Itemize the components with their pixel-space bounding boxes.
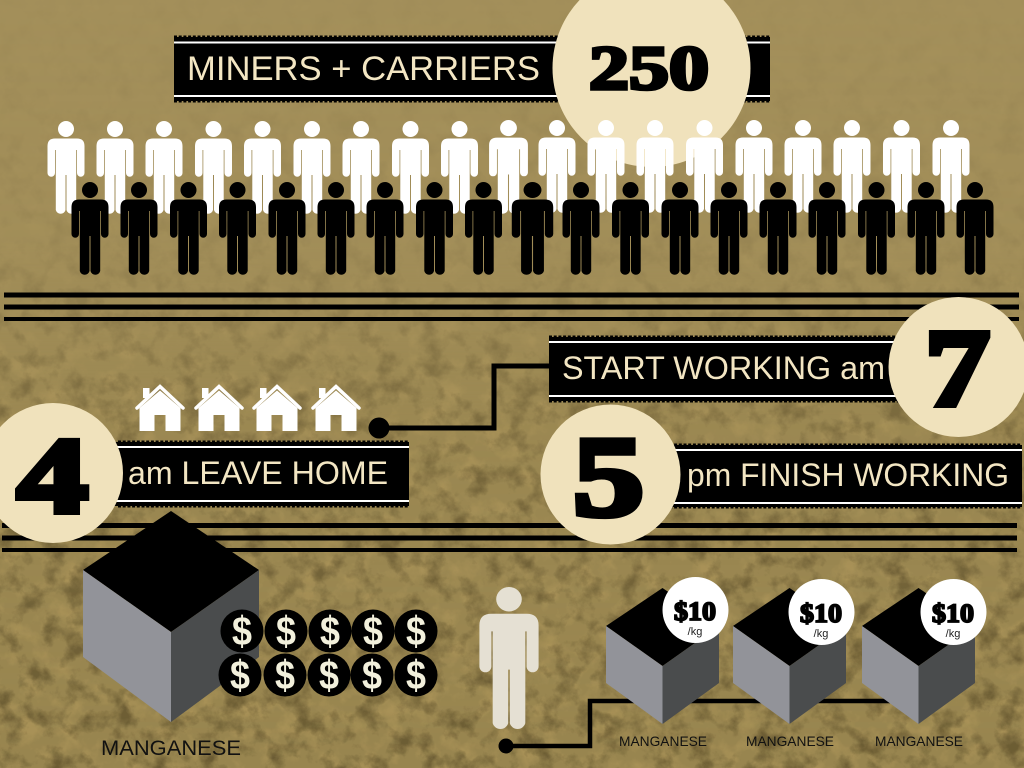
label: manganese 2: MANGANESE [746, 733, 834, 749]
price badge 3 [920, 579, 986, 645]
banner: miners + carriers [174, 37, 770, 101]
cube group 3 [862, 579, 986, 724]
price badge 1 [662, 577, 728, 643]
connector: carrier to cubes [498, 701, 890, 754]
badge: 250: 250 [589, 35, 709, 103]
dollar coins: $ [362, 652, 382, 698]
badge: 7: 7 [925, 307, 990, 429]
label: manganese 3: MANGANESE [875, 733, 963, 749]
banner: start working [549, 337, 909, 401]
background texture [0, 258, 1024, 768]
dollar coins [218, 608, 438, 698]
badge: 5 [540, 404, 680, 544]
banner text: leave home: am LEAVE HOME [128, 455, 388, 491]
dollar coins: $ [406, 652, 426, 698]
price badge 2: /kg [814, 628, 828, 640]
dollar coins: $ [406, 608, 426, 654]
cube group 2 [733, 579, 854, 724]
price badge 2: $10 [800, 599, 842, 628]
price badge 1: $10 [674, 597, 716, 626]
carrier figure [479, 587, 539, 729]
banner text: finish working: pm FINISH WORKING [687, 457, 1009, 493]
label: manganese: MANGANESE [101, 737, 241, 760]
price badge 3: /kg [946, 628, 960, 640]
connector: home to work [368, 366, 552, 438]
price badge 2 [788, 579, 854, 645]
badge: 5: 5 [573, 413, 644, 540]
badge: 7 [888, 297, 1024, 437]
label: manganese 1: MANGANESE [619, 733, 707, 749]
black miners row [72, 182, 994, 275]
banner text: miners + carriers: MINERS + CARRIERS [187, 50, 540, 88]
banner: finish working [660, 445, 1022, 507]
dollar coins: $ [230, 652, 250, 698]
icons: four houses [137, 386, 359, 431]
badge: 4: 4 [17, 417, 88, 536]
cube group 1 [606, 577, 728, 724]
dollar coins: $ [320, 608, 340, 654]
badge: 250 [552, 0, 750, 167]
price badge 1: /kg [688, 626, 702, 638]
banner text: start working: START WORKING am [562, 350, 885, 386]
badge: 4 [0, 403, 123, 543]
dollar coins: $ [232, 608, 252, 654]
white miners row [48, 120, 970, 214]
banner: leave home [100, 442, 409, 506]
dollar coins: $ [319, 652, 339, 698]
price badge 3: $10 [932, 599, 974, 628]
dollar coins: $ [363, 608, 383, 654]
big manganese cube [83, 511, 259, 722]
dollar coins: $ [276, 608, 296, 654]
dollar coins: $ [275, 652, 295, 698]
